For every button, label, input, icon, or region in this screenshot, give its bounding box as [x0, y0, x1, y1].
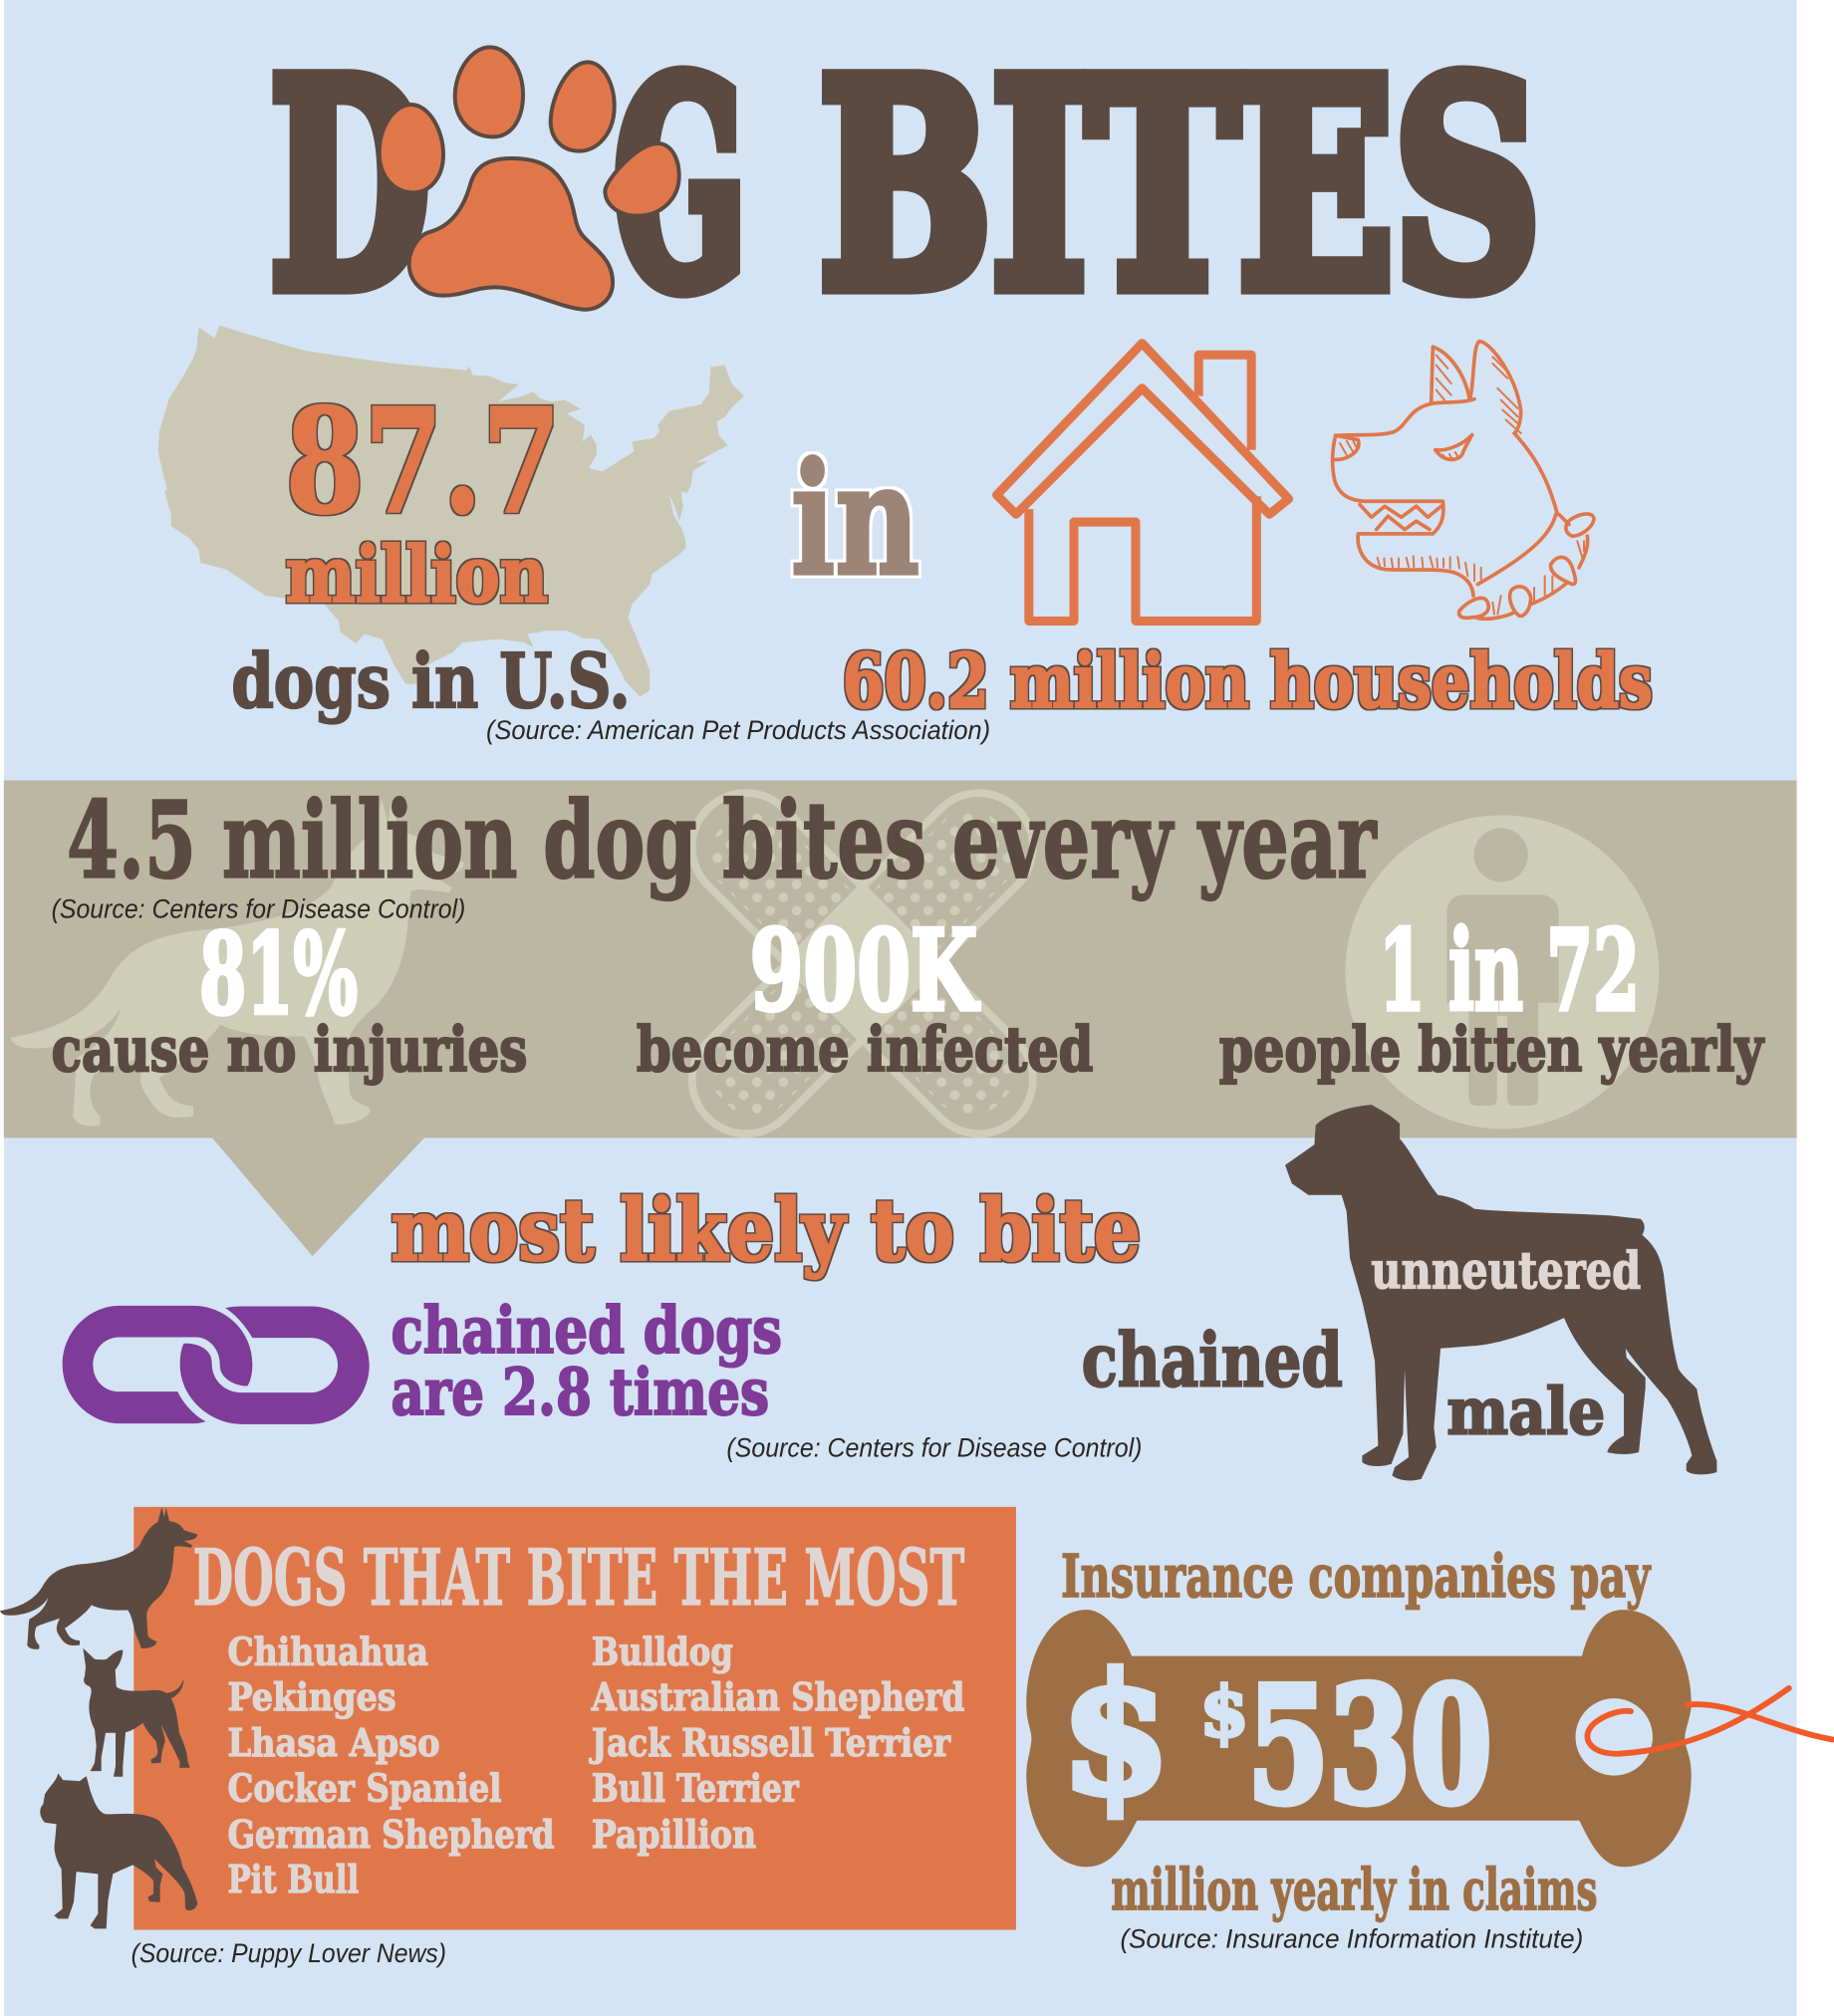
icon: angry dog head [1333, 342, 1594, 619]
german shepherd [0, 1507, 197, 1649]
pointer triangle [212, 1137, 424, 1256]
text: chained dogs are 2.8 times: chained dogs [391, 1293, 782, 1369]
panel: dogs that bite the most [133, 1507, 1016, 1930]
heading: DOGS THAT BITE THE MOST [193, 1533, 964, 1624]
word: in: in [791, 429, 919, 611]
list: column two: Australian Shepherd [591, 1675, 964, 1720]
list: column one: Chihuahua [228, 1631, 428, 1675]
label: chained: chained [1082, 1319, 1343, 1403]
pit bull [40, 1773, 197, 1928]
list: column one: Pekinges [228, 1675, 396, 1720]
stat: 900K [637, 906, 1093, 1086]
icon: three dog silhouettes [0, 1507, 197, 1928]
heading: most likely to bite: most likely to bite [391, 1181, 1141, 1281]
stat: 1 in 72: 1 in 72 [1379, 906, 1640, 1036]
source: Puppy Lover News: (Source: Puppy Lover News) [131, 1937, 446, 1968]
source: American Pet Products Association: (Source: American Pet Products Association) [486, 714, 990, 745]
string tied through bone [1587, 1688, 1833, 1754]
icon: house [997, 344, 1289, 621]
stat: 60.2 million households: 60.2 million households [843, 637, 1653, 725]
list: column two: Jack Russell Terrier [589, 1721, 951, 1766]
title: G [614, 19, 747, 352]
list: column one: Pit Bull [228, 1858, 359, 1902]
text: million yearly in claims: million yearly in claims [1111, 1858, 1597, 1923]
icon: chain links [63, 1306, 370, 1424]
list: column two: Bulldog [592, 1631, 733, 1675]
stat: 1 in 72 [1219, 906, 1765, 1086]
title: D [270, 19, 429, 352]
source: Centers for Disease Control: (Source: Centers for Disease Control) [52, 893, 465, 924]
stat: 900K: become infected [637, 1013, 1093, 1086]
amount $530: 530 [1247, 1651, 1492, 1839]
list: column one: German Shepherd [228, 1813, 554, 1858]
stat: 81% [52, 910, 527, 1086]
amount $530 [1200, 1651, 1492, 1839]
label: dogs in U.S.: dogs in U.S. [231, 637, 631, 725]
hole in bone [1576, 1698, 1653, 1776]
stat: 87.7 million [286, 378, 561, 621]
icon: paw print [380, 47, 679, 310]
title [270, 19, 1541, 352]
background icon: crossed bandages [669, 771, 1055, 1156]
text: chained dogs are 2.8 times: are 2.8 times [391, 1355, 769, 1430]
stat: 81%: cause no injuries [52, 1013, 527, 1086]
source: Insurance Information Institute: (Source: Insurance Information Institute) [1120, 1923, 1583, 1954]
label: unneutered: unneutered [1371, 1241, 1641, 1301]
text: chained dogs are 2.8 times [391, 1293, 782, 1430]
stat: 87.7 million: million [286, 530, 548, 621]
background icon: person in circle [1345, 815, 1659, 1129]
stat: 81%: 81% [199, 910, 358, 1040]
title: BITES [819, 19, 1541, 352]
source: Centers for Disease Control: (Source: Centers for Disease Control) [726, 1431, 1142, 1462]
background icon: dog silhouette [10, 800, 464, 1126]
chihuahua [83, 1648, 190, 1777]
icon: rottweiler silhouette [1285, 1105, 1716, 1480]
list: column two [589, 1631, 964, 1858]
dollar sign large: $ [1061, 1638, 1171, 1831]
stat: 900K: 900K [750, 906, 980, 1036]
map of the United States [158, 326, 744, 696]
stat: 87.7 million: 87.7 [286, 378, 561, 547]
list: column two: Bull Terrier [592, 1766, 799, 1811]
label: male: male [1446, 1374, 1605, 1449]
list: column one: Lhasa Apso [228, 1721, 440, 1766]
list: column one: Cocker Spaniel [228, 1766, 501, 1811]
list: column one [228, 1631, 554, 1902]
panel: 4.5 million dog bites band [4, 771, 1797, 1256]
list: column two: Papillion [592, 1813, 756, 1858]
amount $530: $ [1200, 1672, 1249, 1753]
icon: bone with $530 [1026, 1610, 1833, 1867]
